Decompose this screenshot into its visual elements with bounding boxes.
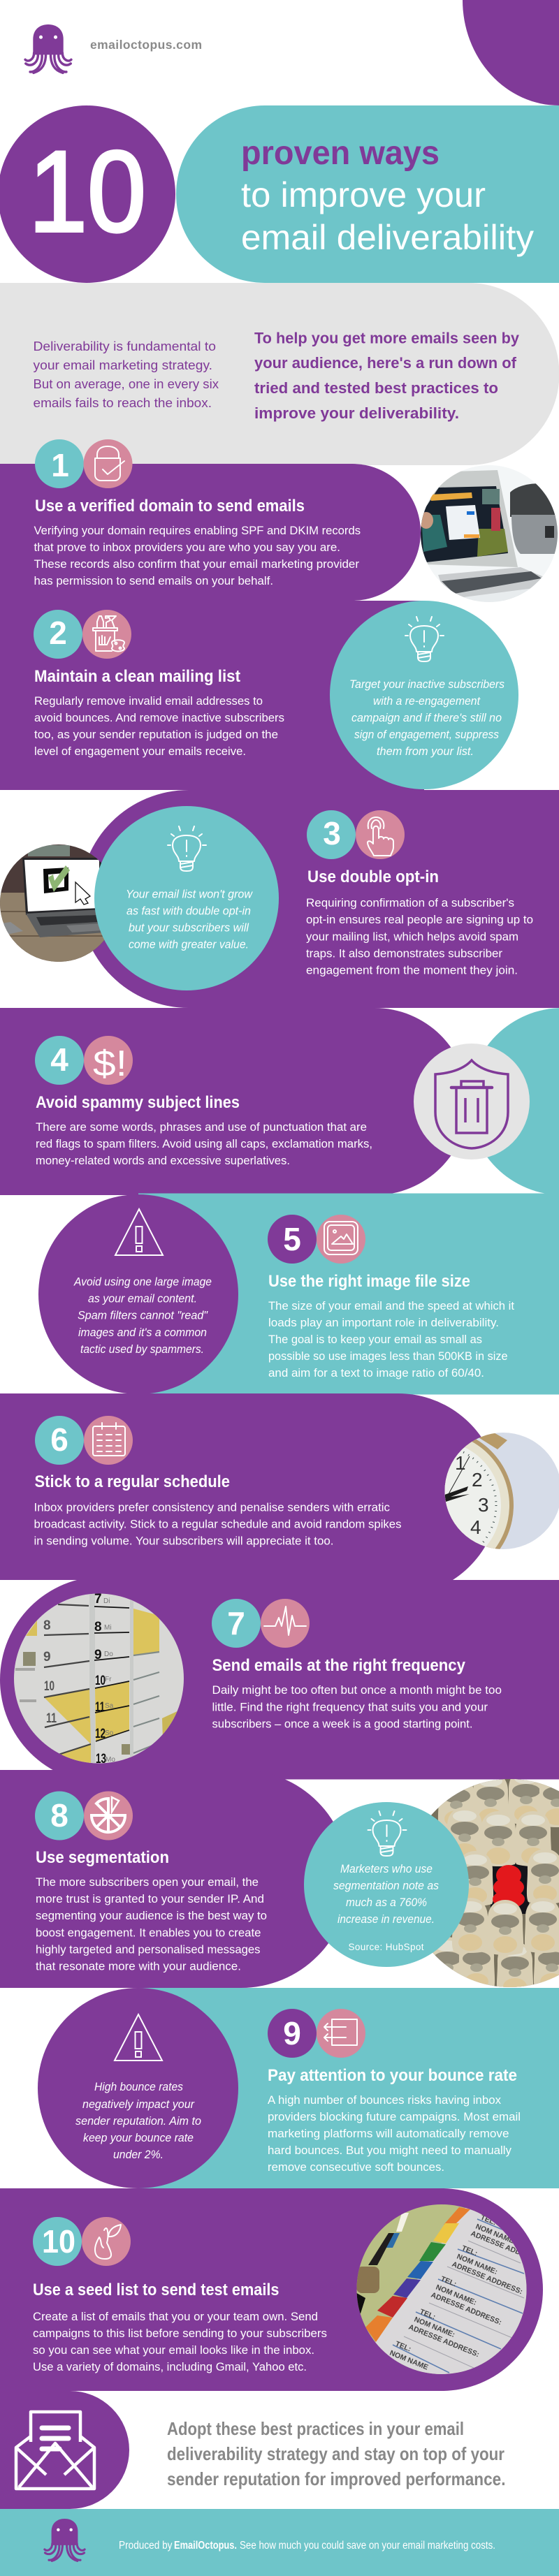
badge number 5: 5 (283, 1221, 301, 1257)
circle with number 10 (0, 105, 175, 283)
badge number 5 (268, 1215, 317, 1264)
body 3: opt-in ensures real people are signing up to (306, 914, 533, 926)
badge number 10: 10 (42, 2223, 75, 2260)
body 1 (34, 525, 361, 587)
badge icon: dollar exclamation: $! (93, 1044, 127, 1084)
body 4: red flags to spam filters. Avoid using all caps, exclamation marks, (36, 1138, 372, 1150)
body 4: money-related words and excessive superlatives. (36, 1155, 290, 1167)
body 6: in sending volume. Your subscribers will appreciate it too. (34, 1535, 334, 1548)
badge number 9 (268, 2009, 317, 2058)
panel: tip 2 background (0, 601, 424, 790)
badge number 1: 1 (51, 447, 69, 483)
body 4: There are some words, phrases and use of punctuation that are (36, 1121, 367, 1134)
body 8: highly targeted and personalised messages (36, 1943, 260, 1956)
body 7 (212, 1684, 502, 1731)
badge number 4: 4 (50, 1041, 68, 1078)
callout text (75, 2081, 201, 2161)
body 1: has permission to send emails on your behalf. (34, 575, 273, 587)
body 8: boost engagement. It enables you to create (36, 1926, 261, 1939)
body 9: remove consecutive soft bounces. (268, 2161, 444, 2174)
intro left text: But on average, one in every six (34, 377, 219, 391)
intro left text: Deliverability is fundamental to (34, 339, 216, 353)
intro right text: tried and tested best practices to (254, 379, 498, 397)
body 8: that resonate more with your audience. (36, 1960, 241, 1973)
photo: wall calendar: So (105, 1729, 114, 1737)
heading 2: Maintain a clean mailing list (34, 667, 240, 686)
photo: address book tabs: NOM NAME: (435, 2283, 478, 2307)
callout text: come with greater value. (129, 939, 249, 951)
decorative teal circle behind tip 4 (469, 1008, 559, 1195)
heading 5: Use the right image file size (268, 1272, 470, 1291)
footer text: See how much you could save on your email marketing costs. (240, 2540, 495, 2552)
callout text: as fast with double opt-in (126, 905, 251, 918)
badge icon: seed sprout (82, 2217, 131, 2266)
photo: laptop with checkbox (0, 844, 105, 962)
callout text: High bounce rates (94, 2081, 183, 2093)
photo: wall calendar: 8 (43, 1618, 51, 1633)
body 7: little. Find the right frequency that suits you and your (212, 1702, 488, 1714)
title pill: to improve your (241, 175, 486, 214)
icon: warning triangle (115, 1209, 163, 1255)
photo: alarm clock: 3 (478, 1494, 489, 1516)
icon: open envelope (16, 2412, 94, 2489)
callout text: keep your bounce rate (83, 2132, 194, 2144)
body 3: Requiring confirmation of a subscriber's (306, 897, 514, 909)
footer text: Produced by (119, 2540, 173, 2552)
closing text: sender reputation for improved performance. (167, 2468, 506, 2489)
body 10: Create a list of emails that you or your team own. Send (33, 2311, 318, 2323)
body 5: loads play an important role in deliverability. (268, 1317, 499, 1329)
intro right text: To help you get more emails seen by (254, 330, 520, 346)
body 8: more trust is granted to your sender IP. And (36, 1893, 264, 1905)
icon: light bulb (368, 1811, 407, 1856)
photo: address book tabs: TEL: (460, 2244, 479, 2258)
body 3: engagement from the moment they join. (306, 964, 518, 976)
white backing under photo (280, 1780, 559, 1988)
callout text: segmentation note as (333, 1880, 439, 1892)
callout: one large image (38, 1194, 238, 1394)
badge icon: pizza slices (84, 1791, 133, 1840)
badge icon: calendar (84, 1416, 133, 1465)
body 10: campaigns to this list before sending to your subscribers (33, 2327, 327, 2340)
body 8: The more subscribers open your email, the (36, 1876, 259, 1889)
body 9: marketing platforms will automatically remove (268, 2128, 509, 2140)
photo: wall calendar: 10 (44, 1679, 55, 1694)
callout text: with a re-engagement (373, 695, 481, 708)
heading 10: Use a seed list to send test emails (33, 2281, 280, 2299)
closing text: deliverability strategy and stay on top of your (167, 2443, 504, 2464)
badge number 2: 2 (49, 615, 67, 651)
photo: address book tabs: NOM NAME (389, 2349, 429, 2372)
title block (0, 105, 559, 283)
badge number 4 (35, 1036, 84, 1085)
body 10: so you can see what your email looks like in the inbox. (33, 2344, 314, 2357)
photo: address book tabs: ADRESSE ADDRESS: (407, 2323, 481, 2359)
callout text (73, 1275, 212, 1356)
badge number 6 (35, 1416, 84, 1465)
intro left text: your email marketing strategy. (34, 358, 212, 372)
photo: laptop (419, 461, 559, 608)
body 2 (34, 695, 284, 758)
badge number 3 (307, 810, 356, 859)
callout text: tactic used by spammers. (80, 1343, 204, 1356)
icon: shield with trash can (414, 1044, 530, 1159)
photo: wall calendar: 11 (46, 1711, 57, 1726)
icon: warning triangle (115, 2014, 162, 2061)
photo: wall calendar: Di (103, 1597, 110, 1605)
body 5: The size of your email and the speed at which it (268, 1300, 514, 1312)
panel: tip 10 (0, 2188, 543, 2391)
intro right text: improve your deliverability. (254, 404, 459, 422)
photo: wall calendar: 9 (43, 1650, 51, 1664)
photo: wall calendar: 12 (95, 1727, 106, 1741)
badge number 7: 7 (227, 1605, 245, 1641)
callout text: Avoid using one large image (73, 1275, 212, 1288)
callout text: Target your inactive subscribers (349, 678, 504, 691)
heading 9: Pay attention to your bounce rate (268, 2066, 517, 2085)
photo: address book tabs: TEL: (440, 2275, 458, 2289)
badge number 10 (33, 2217, 82, 2266)
body 5 (268, 1300, 514, 1380)
callout text: increase in revenue. (337, 1913, 435, 1926)
body 8 (36, 1876, 267, 1973)
callout text: them from your list. (377, 745, 474, 758)
panel: tip 3 (0, 790, 559, 1008)
photo: address book tabs: ADRESSE ADDRESS: (470, 2230, 543, 2265)
badge icon: tapping finger (356, 810, 405, 859)
badge icon: cleaning supplies (82, 610, 131, 659)
callout: segmentation stat (304, 1802, 469, 1967)
icon: light bulb (405, 617, 444, 661)
photo: wall calendar: 11 (95, 1700, 105, 1715)
callout text (333, 1863, 439, 1926)
body 9: providers blocking future campaigns. Most email (268, 2111, 521, 2123)
photo: wall calendar: 13 (96, 1752, 106, 1766)
heading 4: Avoid spammy subject lines (36, 1093, 240, 1112)
callout: double opt-in (94, 806, 279, 990)
panel: tip 4 (0, 1008, 530, 1195)
panel: tip 5 (38, 1193, 559, 1394)
body 3 (306, 897, 533, 976)
closing text: Adopt these best practices in your email (167, 2418, 464, 2439)
badge icon: verified lock (84, 439, 133, 488)
photo: wall calendar: 7 (94, 1592, 102, 1607)
body 6: broadcast activity. Stick to a regular schedule and avoid random spikes (34, 1518, 401, 1531)
photo: wall calendar: 9 (94, 1648, 102, 1662)
circle with number 10: 10 (29, 127, 146, 256)
body 4 (36, 1121, 372, 1167)
title pill (176, 105, 559, 283)
body 7: subscribers – once a week is a good starting point. (212, 1718, 472, 1731)
callout text: as your email content. (88, 1292, 197, 1305)
footer text: EmailOctopus. (174, 2540, 237, 2552)
callout text: negatively impact your (82, 2098, 195, 2111)
intro left text: emails fails to reach the inbox. (34, 396, 212, 410)
photo: alarm clock: 1 (455, 1452, 466, 1474)
photo: alarm clock (444, 1433, 559, 1549)
callout text: images and it's a common (78, 1326, 207, 1339)
photo: wall calendar: Fr (105, 1676, 112, 1683)
callout: inactive subscribers (330, 601, 518, 789)
body 1: that prove to inbox providers you are who you say you are. (34, 541, 340, 554)
panel: closing envelope (0, 2391, 129, 2509)
body 8: segmenting your audience is the best way to (36, 1910, 267, 1922)
panel: tip 7 (0, 1576, 559, 1783)
callout text: sign of engagement, suppress (354, 729, 499, 741)
body 5: The goal is to keep your email as small as (268, 1333, 482, 1346)
corner shape: top right (463, 0, 559, 105)
icon: light bulb (168, 826, 206, 871)
footer text (119, 2540, 495, 2552)
body 9: hard bounces. But you might need to manually (268, 2144, 512, 2157)
panel: tip 8 (0, 1769, 559, 1997)
body 2: too, as your sender reputation is judged on the (34, 729, 278, 741)
body 1: These records also confirm that your email marketing provider (34, 558, 360, 571)
body 9: A high number of bounces risks having inbox (268, 2094, 502, 2107)
callout text: much as a 760% (346, 1896, 427, 1909)
photo: address book tabs: NOM NAME: (456, 2253, 499, 2276)
callout text (126, 888, 253, 951)
footer (0, 2509, 559, 2576)
badge icon: image file (317, 1215, 365, 1264)
body 1: Verifying your domain requires enabling SPF and DKIM records (34, 525, 361, 537)
photo: wall calendar: Sa (105, 1702, 114, 1710)
photo: wall calendar (14, 1592, 184, 1767)
body 5: possible so use images less than 500KB in size (268, 1350, 507, 1363)
body 2: level of engagement your emails receive. (34, 745, 246, 758)
badge number 9: 9 (283, 2015, 301, 2051)
body 9 (268, 2094, 521, 2174)
badge number 6: 6 (50, 1421, 68, 1458)
title pill: proven ways (241, 135, 440, 172)
photo: address book tabs: NOM NAME: (413, 2315, 456, 2339)
panel shape (0, 1576, 559, 1783)
callout text (349, 678, 504, 758)
photo: address book tabs: TEL: (394, 2340, 412, 2354)
badge icon: pulse (261, 1599, 310, 1648)
photo: wall calendar: 8 (94, 1620, 102, 1634)
heading 6: Stick to a regular schedule (35, 1472, 230, 1491)
body 6: Inbox providers prefer consistency and penalise senders with erratic (34, 1502, 390, 1514)
logo: octopus (25, 24, 71, 73)
body 3: your mailing list, which helps avoid spam (306, 930, 518, 943)
badge number 3: 3 (323, 815, 341, 851)
panel: tip 6 (0, 1393, 559, 1582)
body 3: traps. It also demonstrates subscriber (306, 947, 503, 960)
panel: tip 9 (38, 1988, 559, 2188)
callout text: campaign and if there's still no (351, 712, 502, 724)
photo: gummy bears (431, 1779, 559, 1987)
photo: wall calendar: Mo (106, 1756, 115, 1764)
website url: emailoctopus.com (90, 38, 202, 52)
callout text: Spam filters cannot "read" (78, 1309, 208, 1322)
callout text: Your email list won't grow (126, 888, 253, 901)
panel: tip 2 (34, 601, 518, 789)
photo: alarm clock: 2 (472, 1469, 483, 1491)
callout text: under 2%. (113, 2149, 164, 2161)
panel: tip 1 (0, 439, 559, 608)
badge number 7 (212, 1599, 261, 1648)
title pill: email deliverability (241, 218, 534, 257)
intro right text: your audience, here's a run down of (254, 354, 517, 372)
heading 1: Use a verified domain to send emails (35, 497, 305, 515)
callout text: but your subscribers will (129, 922, 249, 935)
closing text (167, 2418, 506, 2489)
callout text: sender reputation. Aim to (75, 2115, 201, 2128)
badge icon: dollar exclamation (84, 1036, 133, 1085)
intro left text (34, 339, 219, 410)
badge number 2 (34, 610, 82, 659)
badge number 1 (35, 439, 84, 488)
photo: alarm clock: 4 (470, 1516, 481, 1538)
badge number 8 (35, 1791, 84, 1840)
intro panel (0, 283, 559, 465)
photo: address book tabs: ADRESSE ADDRESS: (451, 2260, 524, 2296)
photo: wall calendar: Do (104, 1651, 113, 1658)
body 2: Regularly remove invalid email addresses to (34, 695, 263, 708)
intro right text (254, 330, 520, 422)
photo: address book tabs: ADRESSE ADDRESS: (430, 2291, 503, 2327)
badge number 8: 8 (50, 1797, 68, 1834)
photo: address book tabs: TEL: (479, 2213, 498, 2227)
body 2: avoid bounces. And remove inactive subscribers (34, 712, 284, 724)
photo: wall calendar: Mi (104, 1624, 112, 1632)
body 10 (33, 2311, 327, 2373)
body 6 (34, 1502, 401, 1548)
photo: address book tabs (356, 2204, 527, 2374)
photo: wall calendar: 10 (95, 1674, 106, 1688)
photo: address book tabs: NOM NAME: (474, 2223, 518, 2246)
body 7: Daily might be too often but once a month might be too (212, 1684, 502, 1697)
source note: Source: HubSpot (348, 1942, 424, 1952)
heading 3: Use double opt-in (307, 868, 439, 886)
photo: address book tabs: TEL: (419, 2308, 437, 2322)
callout text: Marketers who use (340, 1863, 433, 1875)
callout: bounce rates (38, 1988, 238, 2188)
body 5: and aim for a text to image ratio of 60/40. (268, 1367, 484, 1380)
heading 7: Send emails at the right frequency (212, 1656, 466, 1675)
heading 8: Use segmentation (36, 1848, 169, 1867)
badge icon: bouncing arrows (317, 2009, 365, 2058)
footer logo: octopus (45, 2519, 85, 2561)
body 10: Use a variety of domains, including Gmail, Yahoo etc. (33, 2361, 307, 2373)
